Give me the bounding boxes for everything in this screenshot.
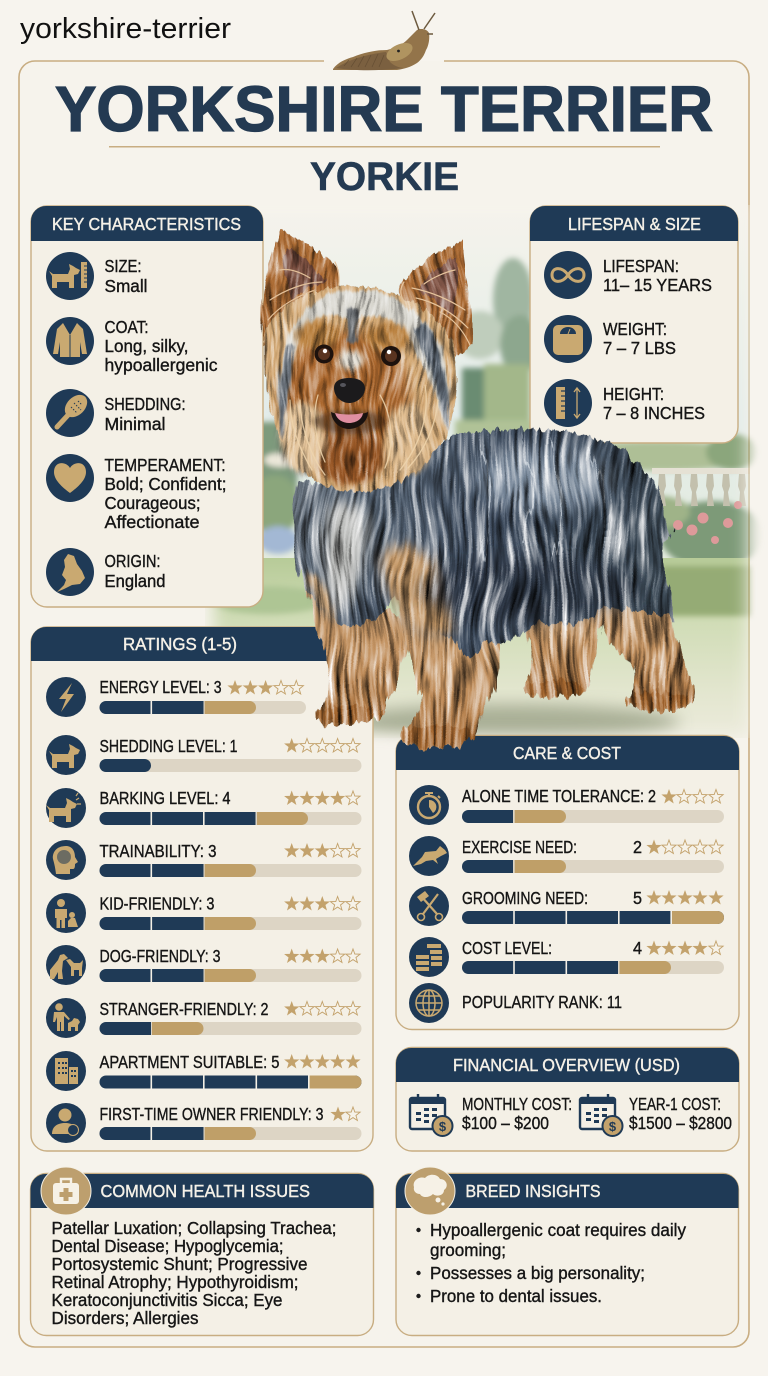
origin text: England	[104, 571, 166, 591]
lifespan text: 11– 15 YEARS	[603, 275, 712, 295]
cheek light left	[278, 402, 326, 474]
monthly cost text	[462, 1094, 572, 1133]
back highlight	[475, 448, 615, 512]
care: alone time	[409, 785, 724, 825]
key characteristics header	[31, 206, 263, 241]
care: cost level	[409, 937, 724, 977]
icon: heart	[46, 454, 94, 502]
icon: england map	[46, 548, 94, 596]
right ear tufts	[401, 270, 470, 345]
cheek light right	[384, 404, 432, 476]
insights list: Hypoallergenic coat requires daily	[430, 1220, 686, 1240]
panel: financial overview	[396, 1048, 739, 1151]
height text	[603, 384, 705, 423]
shedding text: SHEDDING:	[104, 394, 186, 414]
title rule	[109, 146, 660, 148]
lifespan text: LIFESPAN:	[603, 256, 679, 276]
coat text: Long, silky,	[104, 336, 188, 356]
balustrade	[652, 468, 750, 506]
icon: height ruler	[544, 379, 592, 427]
panel: common health issues	[30, 1167, 374, 1336]
icon: size	[46, 252, 94, 300]
temperament text: Courageous;	[104, 493, 200, 513]
lifespan header	[530, 206, 738, 241]
rating: trainability: TRAINABILITY: 3	[100, 841, 216, 861]
garden background scene	[205, 205, 764, 740]
rating: stranger-friendly	[46, 998, 362, 1038]
shedding text: Minimal	[104, 414, 166, 434]
title: YORKSHIRE TERRIER	[55, 73, 713, 145]
icon: infinity	[544, 251, 592, 299]
health issues text: Retinal Atrophy; Hypothyroidism;	[52, 1272, 298, 1292]
front left leg	[305, 580, 412, 726]
origin text	[104, 551, 166, 591]
coat text: hypoallergenic	[104, 355, 218, 375]
ratings heading: RATINGS (1-5)	[123, 634, 237, 654]
rating: energy level	[46, 677, 306, 717]
temperament text: Affectionate	[104, 512, 200, 532]
health issues text: Portosystemic Shunt; Progressive	[52, 1254, 308, 1274]
care: alone time: ALONE TIME TOLERANCE: 2	[462, 786, 656, 806]
height text: 7 – 8 INCHES	[603, 403, 705, 423]
health issues text	[52, 1218, 336, 1328]
dark mouth area	[314, 410, 386, 434]
front right leg	[400, 605, 502, 748]
illustration: yorkshire terrier	[261, 231, 695, 748]
care: cost level: COST LEVEL:	[462, 938, 552, 958]
temperament text: Bold; Confident;	[104, 474, 226, 494]
mouth and tongue	[331, 412, 368, 429]
icon: calendar year one	[580, 1094, 622, 1136]
weight text: WEIGHT:	[603, 319, 667, 339]
chest tan patch	[380, 546, 452, 636]
care heading: CARE & COST	[513, 743, 621, 763]
rating: apartment suitable	[46, 1051, 362, 1091]
panel: lifespan and size	[530, 206, 738, 443]
rating: energy level: ENERGY LEVEL: 3	[100, 677, 222, 697]
insights list: Prone to dental issues.	[430, 1286, 602, 1306]
year one cost text: $1500 – $2800	[629, 1113, 732, 1133]
financial heading: FINANCIAL OVERVIEW (USD)	[453, 1055, 680, 1075]
body coat	[291, 429, 676, 656]
size text: Small	[104, 276, 148, 296]
icon: calendar year one: $	[609, 1119, 617, 1134]
forehead patches	[296, 321, 340, 349]
care: cost level: 4	[633, 938, 642, 958]
care header	[396, 736, 739, 770]
height text: HEIGHT:	[603, 384, 664, 404]
health header	[30, 1174, 374, 1208]
rating: barking level	[46, 788, 362, 828]
near rear leg	[523, 600, 600, 697]
icon: slug	[333, 11, 435, 70]
insights list: grooming;	[430, 1240, 506, 1260]
temperament text	[104, 455, 226, 532]
icon: thought bubble	[405, 1167, 455, 1215]
center light blaze	[338, 350, 364, 370]
left ear tufts	[264, 262, 339, 342]
tan left patch	[306, 574, 336, 625]
left gray stripe	[279, 345, 296, 440]
icon: first aid kit	[41, 1167, 91, 1215]
panel: ratings	[31, 627, 373, 1151]
lifespan text	[603, 256, 712, 295]
center gray line	[347, 308, 357, 342]
handle label: yorkshire-terrier	[20, 13, 231, 45]
coat text: COAT:	[104, 317, 148, 337]
icon: scale	[544, 315, 592, 363]
care: exercise need: 2	[633, 837, 642, 857]
silver crown	[279, 291, 449, 425]
lifespan heading: LIFESPAN & SIZE	[568, 214, 701, 234]
monthly cost text: MONTHLY COST:	[462, 1094, 572, 1114]
icon: coat	[46, 317, 94, 365]
silver chest patch	[322, 502, 369, 610]
rating: shedding level: SHEDDING LEVEL: 1	[100, 736, 238, 756]
care: grooming need: 5	[633, 888, 642, 908]
care: popularity rank	[409, 983, 622, 1023]
health issues text: Disorders; Allergies	[52, 1308, 199, 1328]
origin text: ORIGIN:	[104, 551, 160, 571]
size text: SIZE:	[104, 256, 142, 276]
year one cost text: YEAR-1 COST:	[629, 1094, 721, 1114]
key characteristics heading: KEY CHARACTERISTICS	[52, 214, 241, 234]
rating: barking level: BARKING LEVEL: 4	[100, 788, 231, 808]
icon: calendar monthly	[410, 1094, 452, 1136]
care: grooming need: GROOMING NEED:	[462, 888, 588, 908]
belly shade	[420, 558, 640, 622]
insights heading: BREED INSIGHTS	[466, 1181, 600, 1201]
rating: kid-friendly	[46, 893, 362, 933]
subtitle: YORKIE	[310, 155, 459, 199]
icon: calendar monthly: $	[439, 1119, 447, 1134]
face orange	[281, 331, 409, 459]
rating: trainability	[46, 840, 362, 880]
size text	[104, 256, 148, 296]
lawn	[205, 558, 750, 738]
monthly cost text: $100 – $200	[462, 1113, 549, 1133]
eye left	[314, 344, 334, 364]
year one cost text	[629, 1094, 732, 1133]
mane and face	[263, 286, 458, 491]
weight text	[603, 319, 676, 358]
health issues text: Dental Disease; Hypoglycemia;	[52, 1236, 284, 1256]
health heading: COMMON HEALTH ISSUES	[100, 1181, 310, 1201]
ratings header	[31, 627, 373, 661]
care: exercise need: EXERCISE NEED:	[462, 837, 577, 857]
beard	[316, 425, 384, 485]
far rear leg	[596, 590, 695, 712]
panel: care and cost	[396, 736, 739, 1030]
rating: dog-friendly: DOG-FRIENDLY: 3	[100, 946, 220, 966]
rating: dog-friendly	[46, 945, 362, 985]
shedding text	[104, 394, 186, 434]
health issues text: Keratoconjunctivitis Sicca; Eye	[52, 1290, 282, 1310]
rating: apartment suitable: APARTMENT SUITABLE: 5	[100, 1052, 280, 1072]
eye right	[381, 346, 401, 366]
rating: first-time owner friendly: FIRST-TIME OWNER FRIENDLY: 3	[100, 1104, 324, 1124]
insights list	[416, 1220, 686, 1306]
dog shadow	[340, 704, 680, 740]
panel: breed insights	[396, 1167, 738, 1336]
icon: brush	[46, 389, 94, 437]
face highlights	[290, 385, 438, 475]
care: exercise need	[409, 836, 724, 876]
rating: shedding level	[46, 735, 362, 775]
care: grooming need	[409, 886, 724, 926]
insights list: Possesses a big personality;	[430, 1263, 645, 1283]
coat text	[104, 317, 218, 375]
insights header	[396, 1174, 738, 1208]
panel: key characteristics	[31, 206, 263, 607]
health issues text: Patellar Luxation; Collapsing Trachea;	[52, 1218, 336, 1238]
weight text: 7 – 7 LBS	[603, 338, 676, 358]
rating: kid-friendly: KID-FRIENDLY: 3	[100, 894, 214, 914]
rating: stranger-friendly: STRANGER-FRIENDLY: 2	[100, 999, 268, 1019]
left ear	[261, 231, 339, 345]
nose	[334, 378, 365, 403]
right gray stripe	[414, 322, 450, 432]
roses	[673, 501, 742, 544]
temperament text: TEMPERAMENT:	[104, 455, 226, 475]
rating: first-time owner friendly	[46, 1103, 362, 1143]
financial header	[396, 1048, 739, 1082]
care: popularity rank: POPULARITY RANK: 11	[462, 992, 622, 1012]
right ear	[400, 241, 473, 360]
